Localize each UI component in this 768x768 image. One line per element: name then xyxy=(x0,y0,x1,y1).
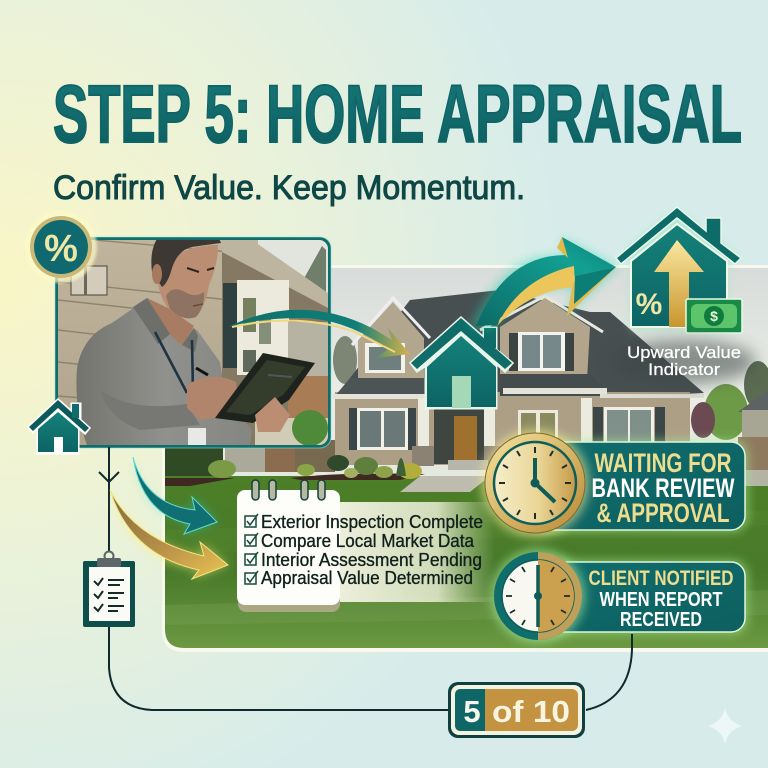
icon: clock notified xyxy=(491,549,585,643)
money icon: $ xyxy=(710,308,718,324)
icon: sparkle xyxy=(708,708,742,744)
panel: client notified: WHEN REPORT xyxy=(600,589,722,611)
panel: client notified: CLIENT NOTIFIED xyxy=(588,567,734,590)
man xyxy=(76,223,252,445)
text: upward value indicator: Upward Value xyxy=(627,343,741,362)
wall lamp xyxy=(71,266,107,295)
checklist text: Exterior Inspection Complete xyxy=(261,512,483,532)
progress badge: of 10 xyxy=(492,694,570,729)
progress badge xyxy=(448,682,585,738)
text: upward value indicator xyxy=(612,340,756,384)
icon: clipboard xyxy=(83,552,135,627)
panel: appraiser photo xyxy=(55,223,331,448)
icon: clock waiting xyxy=(481,429,589,537)
arrow: photo to house xyxy=(228,310,410,358)
background trees right xyxy=(691,361,768,482)
panel: house photo xyxy=(162,265,768,652)
icon: percent badge: % xyxy=(44,228,78,270)
shrubs xyxy=(208,455,422,479)
panel: waiting for bank review: & APPROVAL xyxy=(596,498,730,528)
checklist text: Compare Local Market Data xyxy=(261,531,475,551)
icon: small house xyxy=(29,400,89,453)
icon: percent badge xyxy=(25,211,97,283)
connector line xyxy=(99,447,632,710)
house roofs and walls xyxy=(333,290,704,470)
lawn xyxy=(165,470,768,651)
checkbox icons xyxy=(245,514,258,584)
left garage and fence xyxy=(165,440,335,476)
tablet and hands xyxy=(187,353,315,432)
gold up arrow xyxy=(654,240,704,327)
text: upward value indicator: Indicator xyxy=(648,360,720,379)
arrow: value up xyxy=(470,237,618,328)
panel: client notified: RECEIVED xyxy=(620,609,702,631)
siding lines xyxy=(58,240,222,398)
progress badge: 5 xyxy=(463,694,481,729)
subtitle: Confirm Value. Keep Momentum. xyxy=(53,169,525,207)
icon: upward value house xyxy=(616,207,742,333)
panel: checklist notepad xyxy=(237,480,495,612)
checklist text: Interior Assessment Pending xyxy=(261,550,482,570)
icon: house center xyxy=(411,318,512,408)
arrow: gold to checklist xyxy=(110,490,228,579)
checklist text: Appraisal Value Determined xyxy=(261,568,473,588)
fence and bush xyxy=(255,376,328,446)
icon: upward value house: % xyxy=(636,288,662,321)
panel: client notified xyxy=(530,560,748,634)
panel: waiting for bank review xyxy=(530,440,748,532)
arrow: teal to checklist xyxy=(133,457,217,534)
window and shutter xyxy=(223,280,328,378)
sky and eave xyxy=(222,240,328,445)
checklist text xyxy=(261,512,483,588)
